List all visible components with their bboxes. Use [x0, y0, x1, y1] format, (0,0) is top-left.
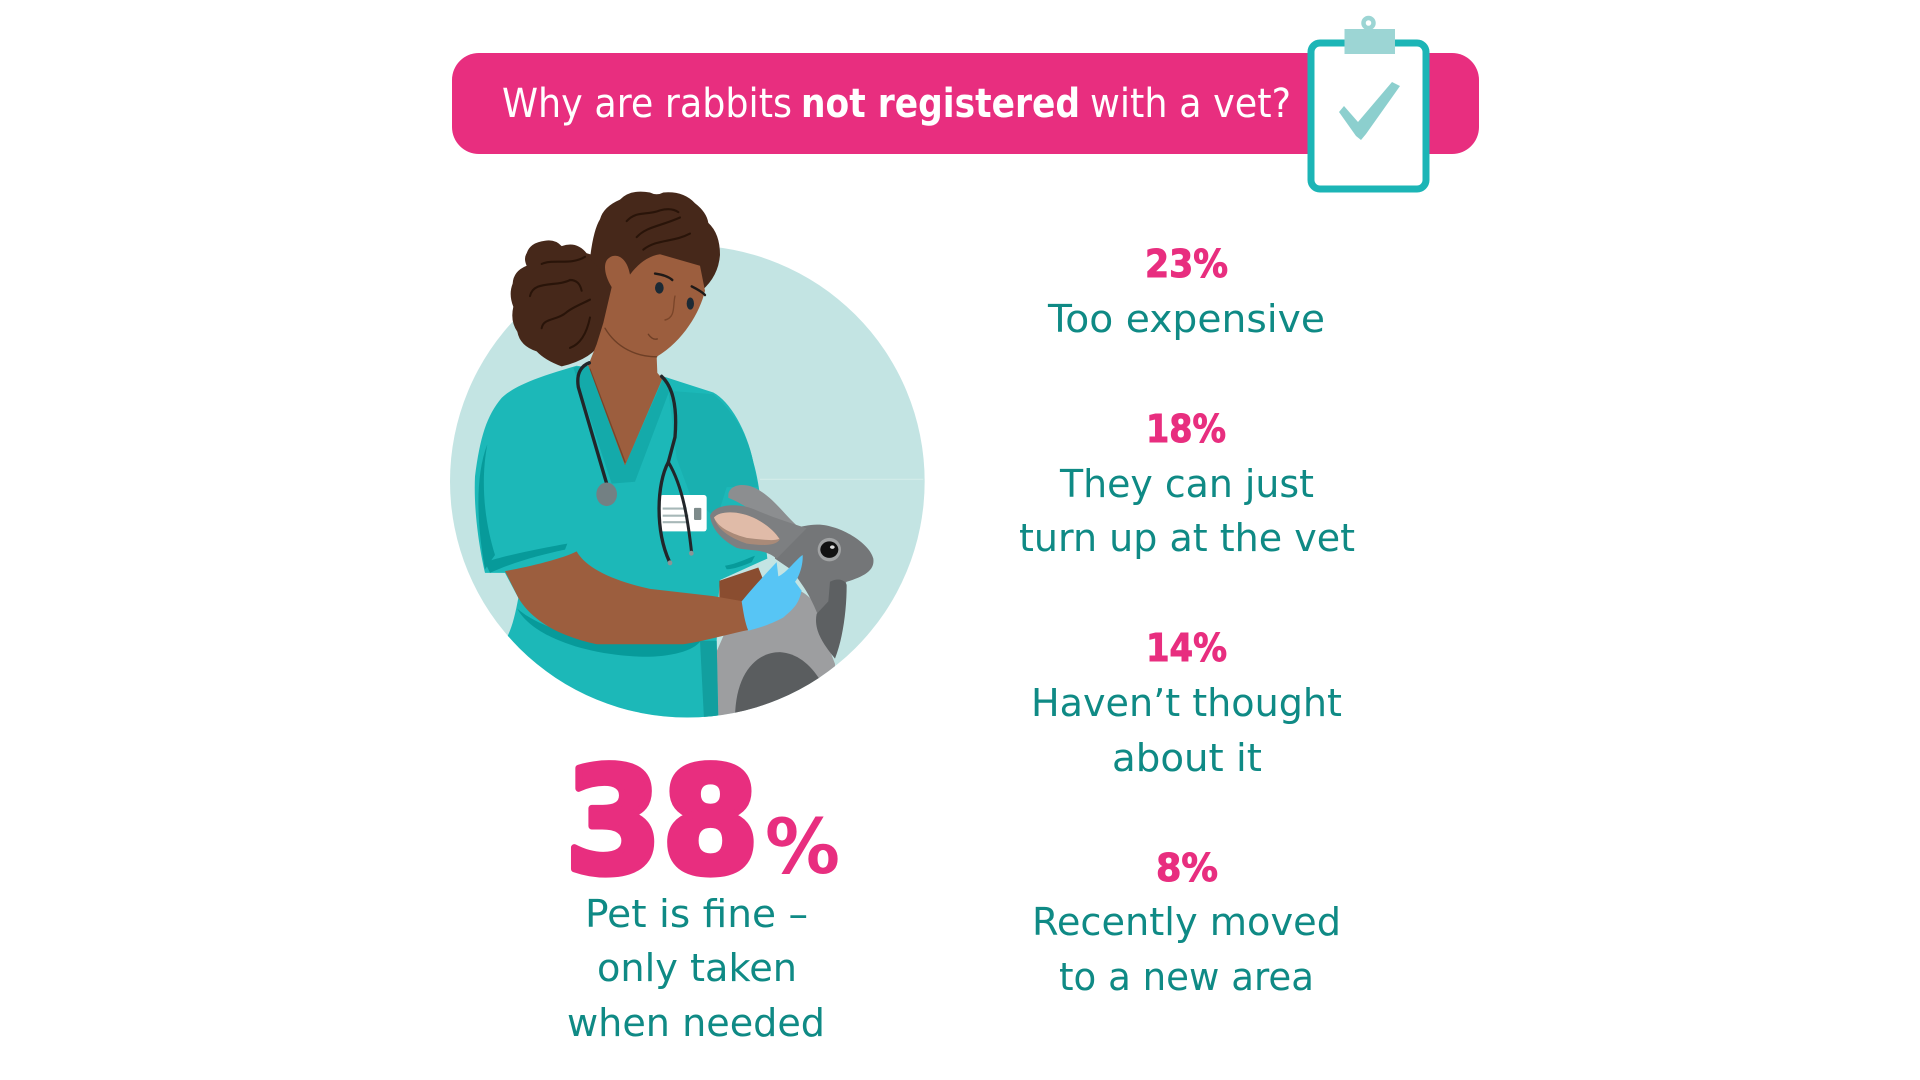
- stat: 18% they can just turn up: turn up at the vet: [1019, 516, 1355, 560]
- title text: with a vet?: [1090, 81, 1291, 127]
- main statistic: 38%: 38: [565, 737, 759, 907]
- blue glove: [742, 555, 803, 631]
- near arm: [505, 551, 748, 644]
- illustration: vet holding a rabbit: [450, 192, 925, 719]
- stat: 8% recently moved: Recently moved: [1032, 900, 1341, 944]
- rabbit body: [717, 584, 835, 719]
- rabbit head: [710, 505, 873, 659]
- stat: 8% recently moved: 8%: [1156, 846, 1218, 890]
- scrubs top: [475, 366, 767, 719]
- stat: 14% haven't thought about it: about it: [1112, 736, 1262, 780]
- scrubs details: [478, 366, 758, 573]
- icon: clipboard with check mark: [1311, 18, 1426, 189]
- stat: 23% too expensive: [1047, 242, 1325, 341]
- stat: 8% recently moved: [1032, 846, 1341, 999]
- facial features: [530, 209, 705, 462]
- stat: 14% haven't thought about it: [1031, 626, 1342, 780]
- stat: 23% too expensive: 23%: [1145, 242, 1228, 286]
- stat: 14% haven't thought about it: 14%: [1146, 626, 1227, 670]
- main statistic: 38%: %: [765, 802, 840, 891]
- far arm: [719, 567, 763, 605]
- stat: 8% recently moved: to a new area: [1059, 955, 1314, 999]
- scrubs and rabbit lower body, clipped to the circle: [475, 366, 835, 719]
- stat: 23% too expensive: Too expensive: [1047, 297, 1325, 341]
- title banner: [452, 53, 1479, 154]
- ponytail hair: [511, 240, 617, 366]
- stat: 18% they can just turn up: 18%: [1146, 407, 1226, 451]
- name badge: [660, 495, 707, 531]
- stat: 18% they can just turn up: [1019, 407, 1355, 560]
- main statistic caption: Pet is fine –: [585, 892, 808, 936]
- stat: 18% they can just turn up: They can just: [1059, 462, 1314, 506]
- top hair: [590, 192, 720, 291]
- rabbit back ear: [728, 485, 800, 537]
- background circle: [450, 245, 925, 717]
- stethoscope: [578, 363, 694, 565]
- main statistic caption: when needed: [567, 1001, 825, 1045]
- face and neck: [587, 254, 705, 467]
- main statistic caption: only taken: [597, 946, 797, 990]
- main statistic caption: [567, 892, 825, 1045]
- stat: 14% haven't thought about it: Haven’t thought: [1031, 681, 1342, 725]
- title text: Why are rabbits: [502, 81, 792, 127]
- title text: not registered: [801, 81, 1080, 127]
